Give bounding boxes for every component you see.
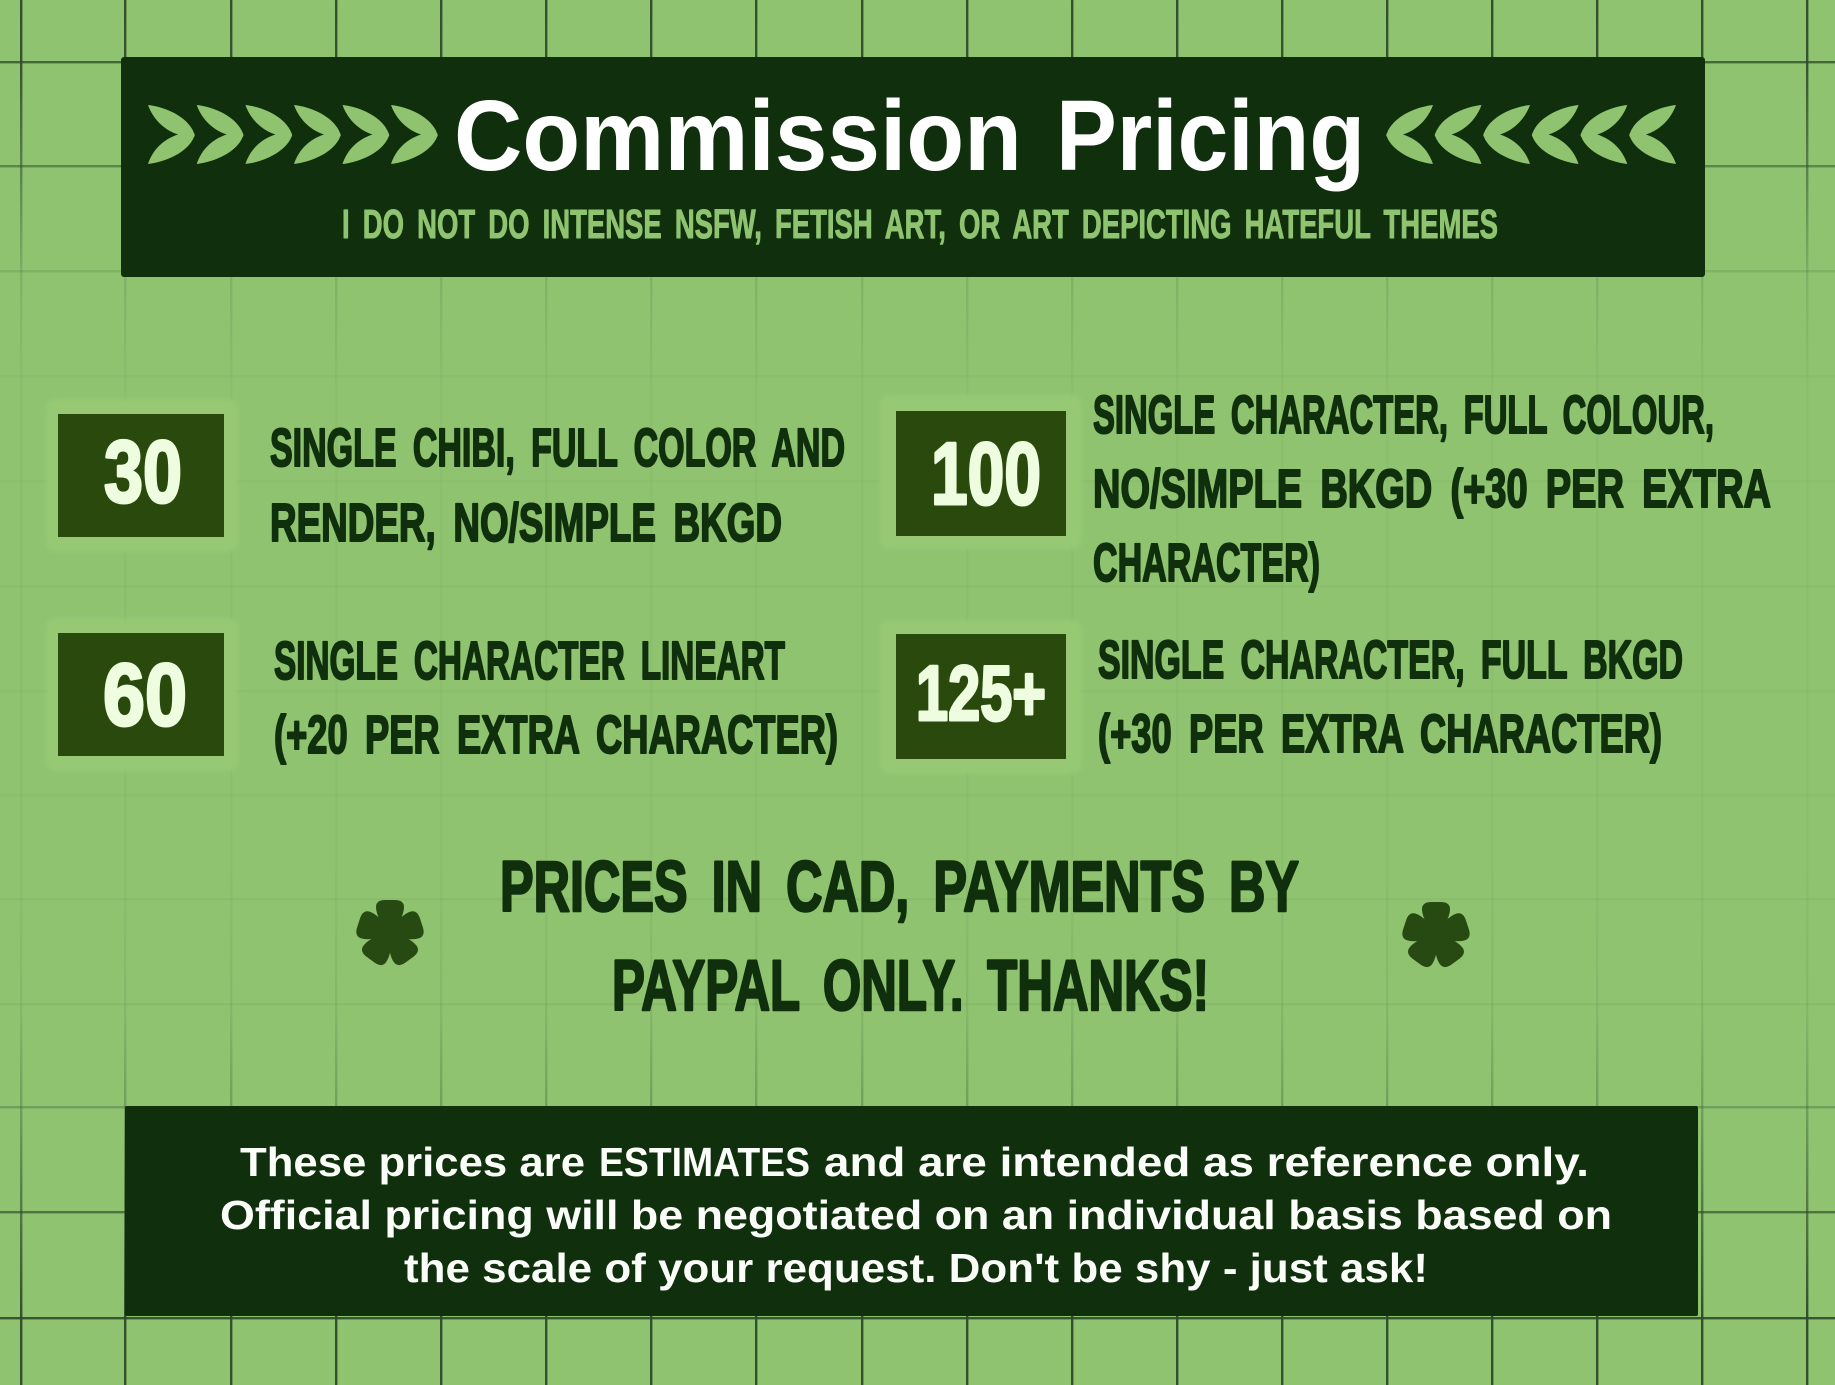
icon: left clover (354, 900, 426, 968)
price item: 30: SINGLE CHIBI, FULL COLOR AND (270, 418, 845, 478)
price item: 60: SINGLE CHARACTER LINEART (274, 631, 785, 691)
panel: disclaimer: and are intended as reference only. (824, 1139, 1589, 1185)
price item: 60: 60 (103, 645, 187, 744)
panel: disclaimer: the scale of your request. Don't be shy - just ask! (404, 1245, 1428, 1291)
price item: 30: 30 (104, 422, 182, 521)
title (454, 80, 1365, 192)
price item: 125+: 125+ (916, 649, 1046, 737)
price item: 100: 100 (931, 424, 1041, 523)
price item: 100 (880, 385, 1771, 593)
price item: 60 (46, 618, 838, 771)
payment note (500, 848, 1299, 1026)
icon: right clover (1400, 902, 1472, 970)
price item: 60: (+20 PER EXTRA CHARACTER) (274, 705, 838, 765)
price item: 125+ (880, 620, 1683, 774)
icon: left chevrons (148, 105, 438, 164)
panel: disclaimer: Official pricing will be negotiated on an individual basis based on (220, 1192, 1612, 1238)
payment note: PRICES IN CAD, PAYMENTS BY (500, 848, 1299, 927)
price item: 100: CHARACTER) (1093, 533, 1320, 593)
icon: right chevrons (1386, 105, 1676, 164)
panel: disclaimer: These prices are (240, 1139, 585, 1185)
panel: disclaimer: ESTIMATES (599, 1139, 810, 1185)
title: Commission (454, 80, 1022, 192)
payment note: PAYPAL ONLY. THANKS! (612, 947, 1209, 1026)
price item: 30 (46, 399, 845, 553)
panel: header (121, 57, 1705, 277)
price item: 30: RENDER, NO/SIMPLE BKGD (270, 493, 782, 553)
panel: disclaimer (125, 1106, 1698, 1316)
title: Pricing (1056, 80, 1365, 192)
